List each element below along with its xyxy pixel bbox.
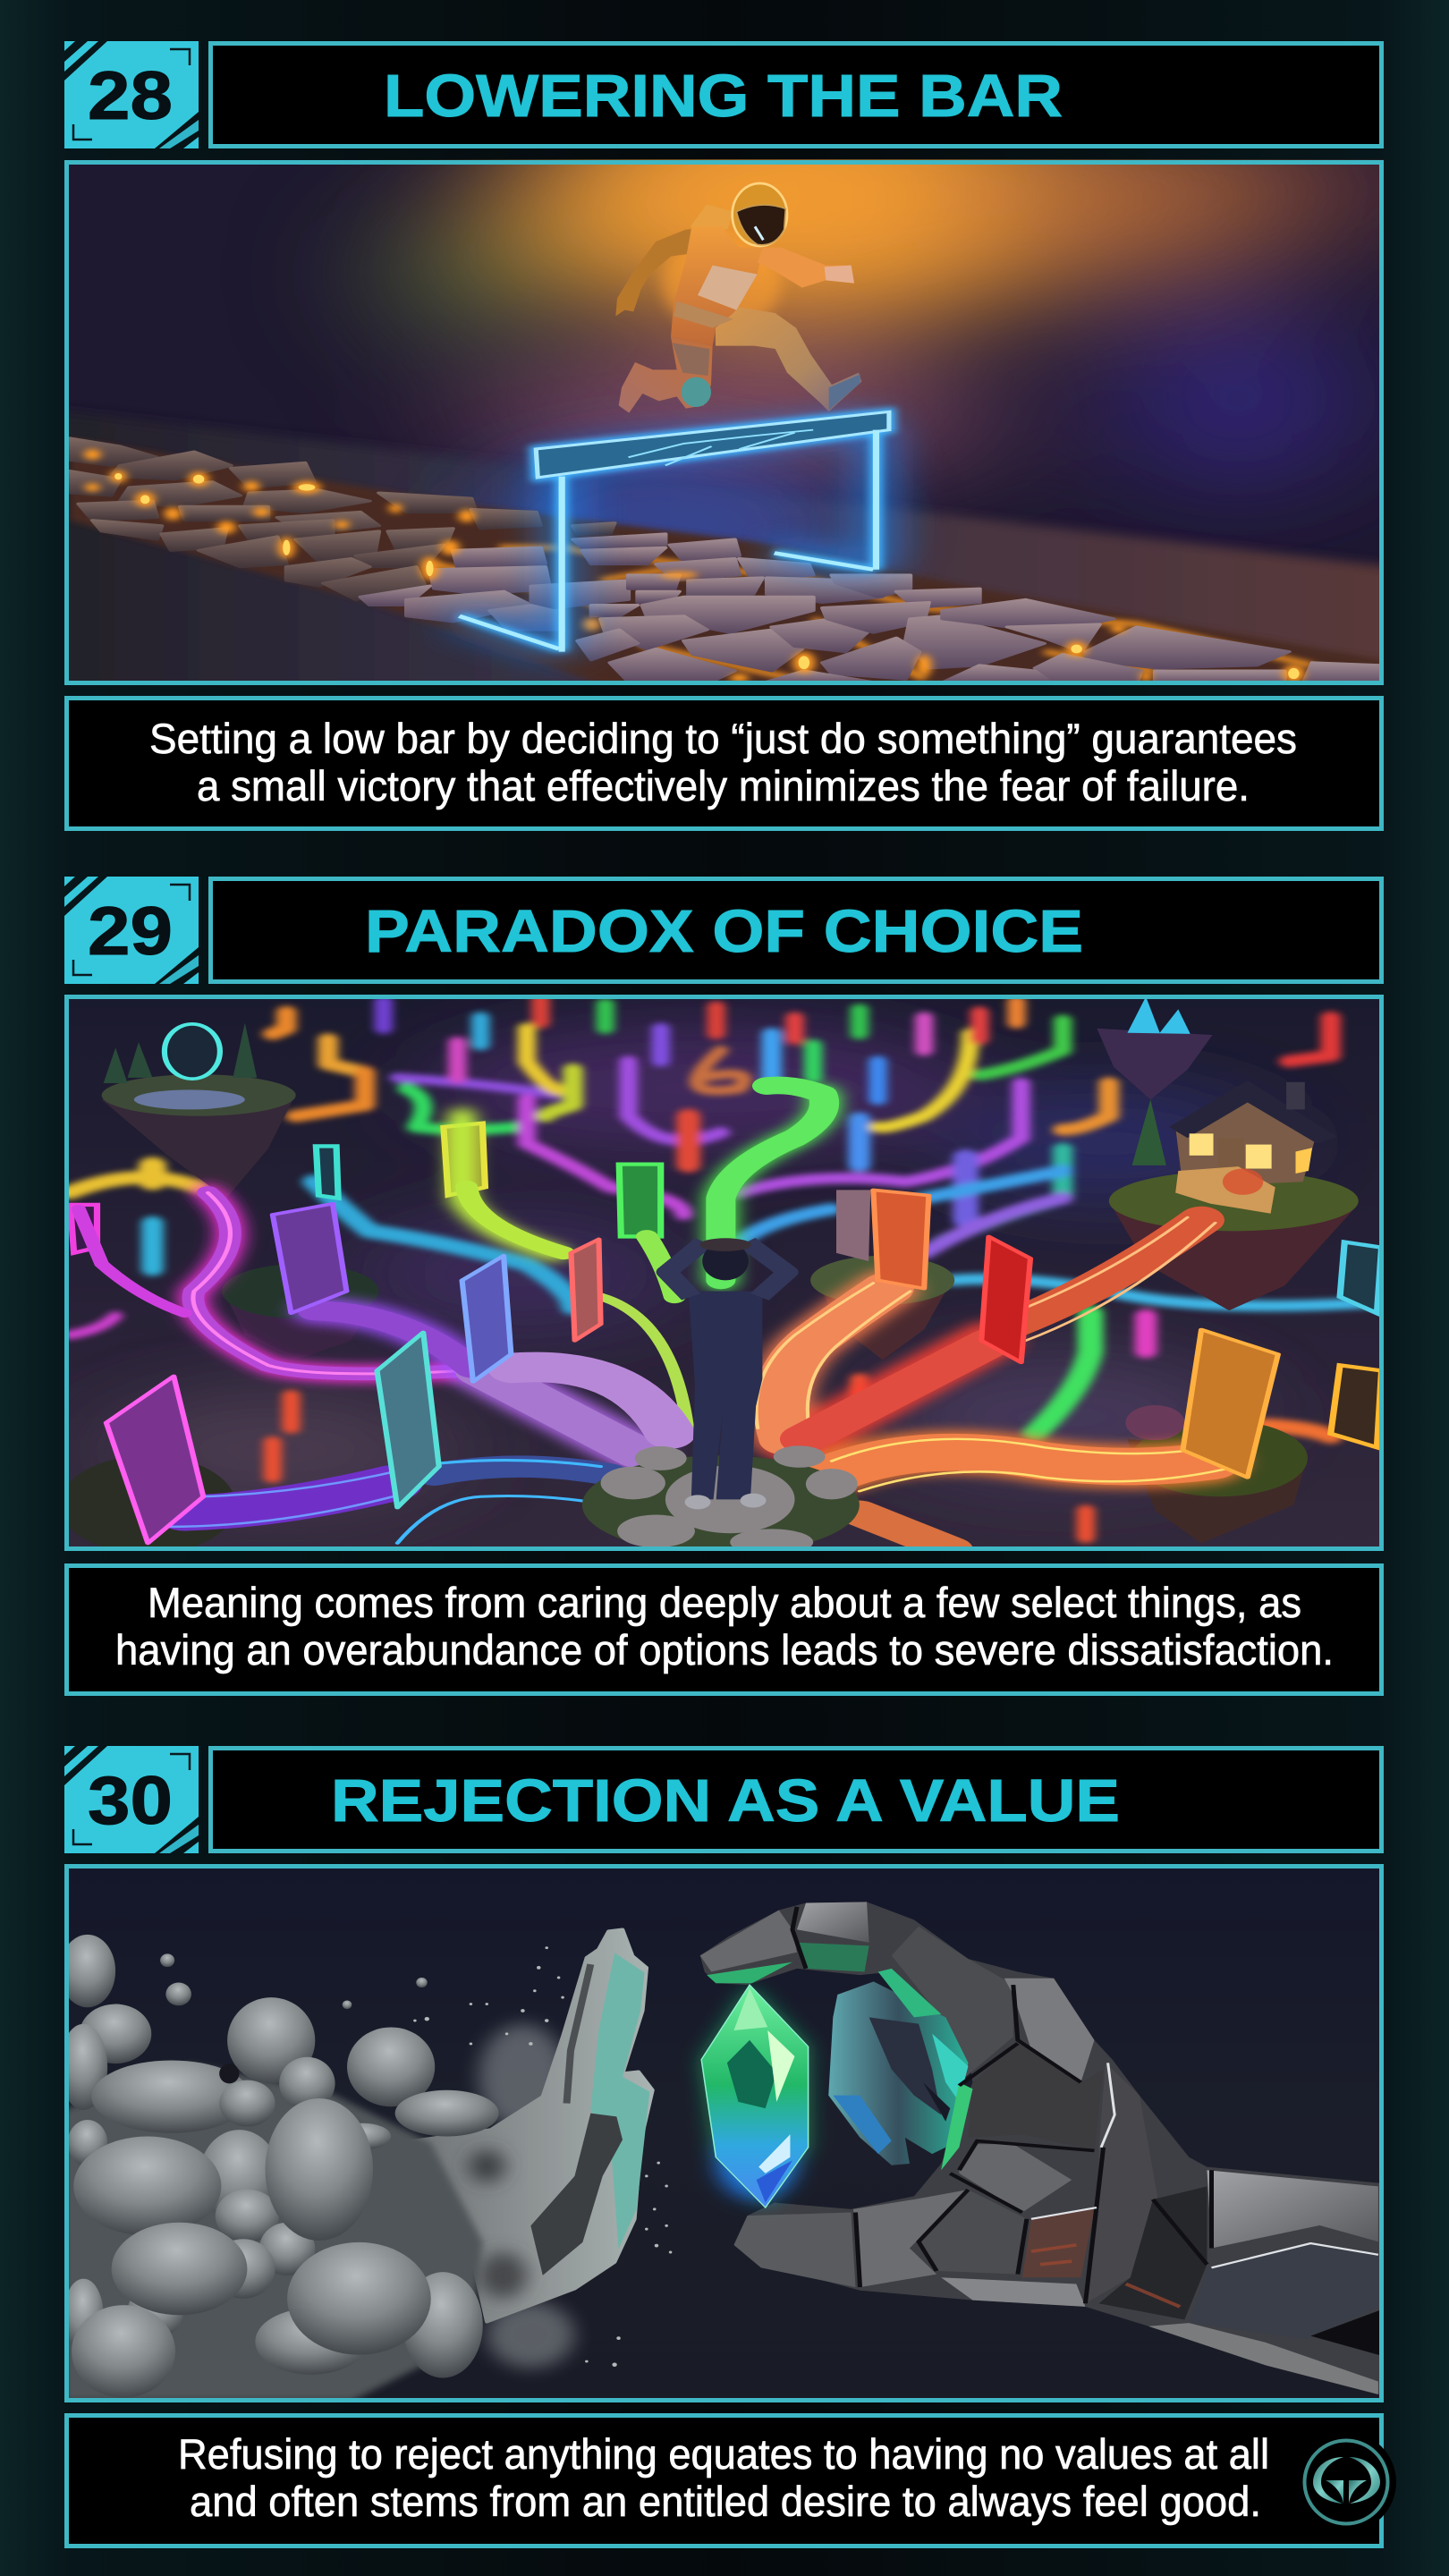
number badge 28 <box>64 41 199 148</box>
caption box <box>66 1565 1381 1694</box>
island with portal <box>102 1023 296 1199</box>
middle islands <box>60 1256 1308 1555</box>
caption box: and often stems from an entitled desire to always feel good. <box>190 2478 1261 2525</box>
rock island under the person <box>582 1445 860 1555</box>
caption box: Meaning comes from caring deeply about a few select things, as <box>148 1579 1301 1626</box>
icon: neon hurdle <box>459 411 889 652</box>
panel frames <box>66 163 1381 2401</box>
illustration: astronaut hurdling a low neon bar over cracked lava stones <box>64 159 1384 831</box>
illustration: clay hand rejecting blobs, robot hand holding a crystal <box>60 1868 1380 2401</box>
background network of distant doors and paths <box>69 998 1377 1538</box>
house island <box>1109 1080 1359 1310</box>
mid doors <box>71 1123 1382 1447</box>
caption box: Setting a low bar by deciding to “just do something” guarantees <box>149 715 1297 762</box>
illustration: person facing a maze of glowing doors and paths <box>60 995 1384 1555</box>
title bar <box>211 878 1381 982</box>
section 30: rejection as a value <box>60 1746 1381 2546</box>
title bar <box>211 43 1381 147</box>
title bar <box>211 1748 1381 1852</box>
number badge 28: 28 <box>88 58 173 134</box>
number badge 30 <box>64 1746 199 1853</box>
number badge 29 <box>64 877 199 984</box>
section 29: paradox of choice <box>60 877 1384 1694</box>
caption box: Refusing to reject anything equates to having no values at all <box>178 2430 1269 2478</box>
icon: leaping astronaut <box>615 183 861 413</box>
stone path <box>69 438 1384 684</box>
icon: circular logo <box>1296 2432 1396 2532</box>
foreground doors <box>106 1190 1278 1543</box>
icon: robot hand and arm <box>700 1902 1380 2394</box>
crystal island <box>1097 996 1213 1099</box>
title bar: REJECTION AS A VALUE <box>331 1767 1120 1835</box>
glowing paths from the doors <box>79 1085 1224 1550</box>
title bar: PARADOX OF CHOICE <box>365 898 1083 965</box>
icon: person holding their head <box>667 1238 787 1509</box>
title bar: LOWERING THE BAR <box>384 63 1063 130</box>
dust particles <box>413 1946 672 2367</box>
caption box: having an overabundance of options leads to severe dissatisfaction. <box>115 1626 1334 1674</box>
number badge 29: 29 <box>88 894 173 970</box>
clay hand and blobs <box>60 1929 672 2401</box>
icon: green crystal <box>701 1985 809 2207</box>
number badge 30: 30 <box>88 1763 173 1839</box>
caption box <box>66 2415 1381 2546</box>
caption box <box>66 698 1381 828</box>
caption box: a small victory that effectively minimizes the fear of failure. <box>197 762 1250 809</box>
